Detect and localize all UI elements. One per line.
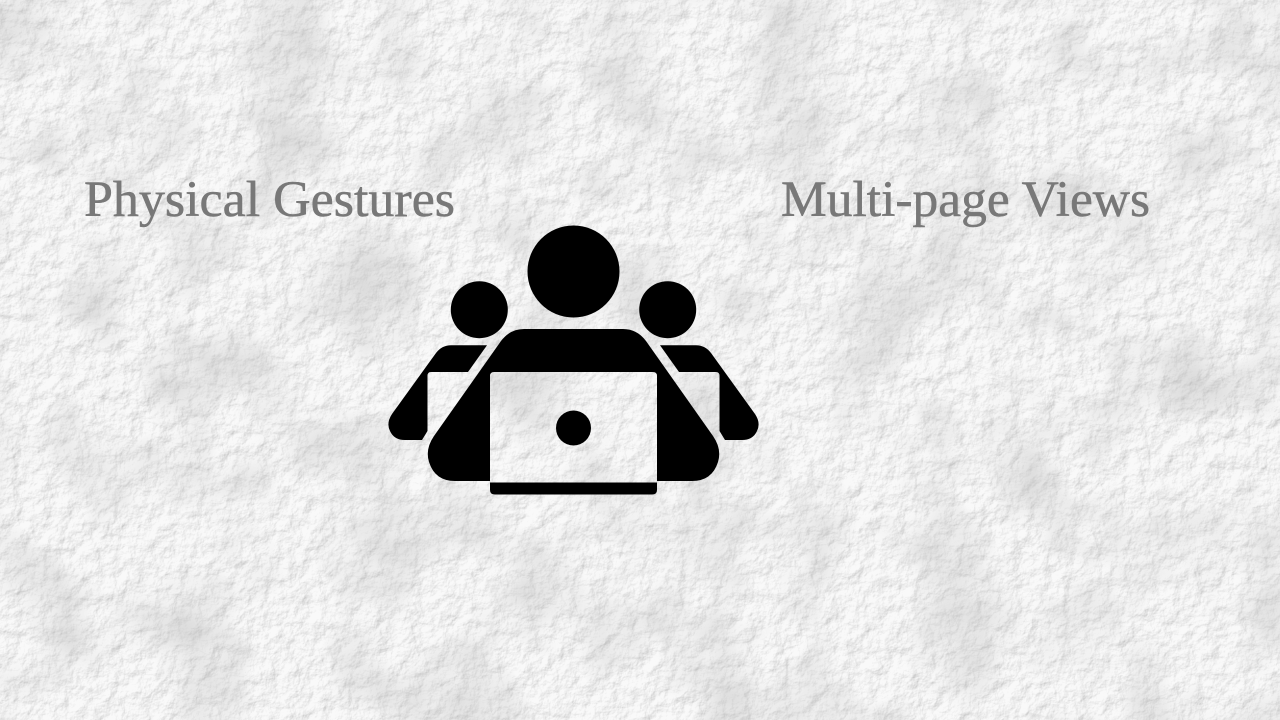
- heading: Multi-page Views: Multi-page Views: [781, 172, 1150, 228]
- icon: left person head: [451, 281, 508, 338]
- icon: centre person body with laptop cutout: [428, 329, 719, 481]
- icon: laptop base: [490, 482, 657, 494]
- icon: three people around a laptop: [388, 226, 759, 494]
- icon: right person body: [660, 345, 759, 440]
- icon: right person head: [639, 281, 696, 338]
- icon: left person body: [388, 345, 487, 440]
- heading: Physical Gestures: Physical Gestures: [84, 172, 455, 228]
- icon: laptop dot: [556, 410, 591, 446]
- icon: centre person head: [528, 226, 620, 318]
